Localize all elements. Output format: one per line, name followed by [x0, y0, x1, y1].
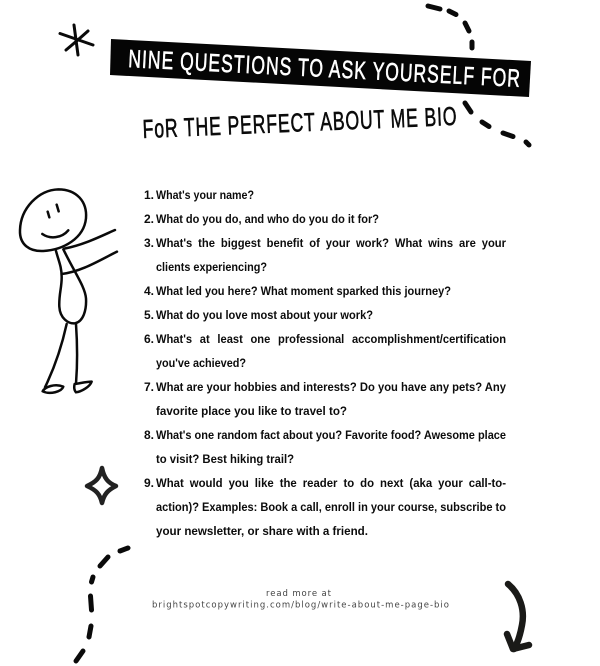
question 7: favorite place you like to travel to?	[156, 404, 347, 418]
question 3: clients experiencing?	[156, 260, 267, 274]
question 9: your newsletter, or share with a friend.	[156, 524, 368, 538]
footer link: brightspotcopywriting.com/blog/write-about-me-page-bio	[152, 600, 449, 610]
icon: stick figure	[20, 189, 117, 393]
question 6: What's at least one professional accomplishment/certification	[156, 332, 506, 346]
question 4: What led you here? What moment sparked this journey?	[156, 284, 451, 298]
question 6	[144, 332, 506, 370]
top dashed curve	[428, 6, 472, 48]
footer link	[152, 589, 449, 610]
question 5: 5.	[144, 308, 154, 322]
lower right dashed curve	[465, 103, 529, 145]
question 9	[144, 476, 506, 538]
question 1: 1.	[144, 188, 154, 202]
question 9: What would you like the reader to do next (aka your call-to-	[156, 476, 506, 490]
question 2: What do you do, and who do you do it for?	[156, 212, 379, 226]
question 3: What's the biggest benefit of your work? What wins are your	[156, 236, 506, 250]
question 7	[144, 380, 506, 418]
bottom left dashed curve	[76, 548, 128, 661]
icon: four-point star	[87, 468, 116, 503]
question 9: action)? Examples: Book a call, enroll in your course, subscribe to	[156, 500, 506, 514]
question 7: 7.	[144, 380, 154, 394]
question 7: What are your hobbies and interests? Do you have any pets? Any	[156, 380, 506, 394]
question 3: 3.	[144, 236, 154, 250]
question 6: 6.	[144, 332, 154, 346]
footer link: read more at	[266, 589, 332, 599]
arrow pointing down	[507, 584, 529, 649]
question 9: 9.	[144, 476, 154, 490]
subtitle: FoR THE PERFECT ABOUT ME BIO	[142, 101, 457, 144]
question 8: 8.	[144, 428, 154, 442]
question 3	[144, 236, 506, 274]
question 8	[144, 428, 506, 466]
question 8: What's one random fact about you? Favorite food? Awesome place	[156, 428, 506, 442]
question 5: What do you love most about your work?	[156, 308, 373, 322]
question 6: you've achieved?	[156, 356, 246, 370]
question 2: 2.	[144, 212, 154, 226]
question 1: What's your name?	[156, 188, 254, 202]
question 8: to visit? Best hiking trail?	[156, 452, 294, 466]
title banner: NINE QUESTIONS TO ASK YOURSELF FOR	[128, 44, 521, 93]
question 4: 4.	[144, 284, 154, 298]
icon: asterisk doodle	[60, 25, 93, 55]
question list	[144, 188, 506, 538]
